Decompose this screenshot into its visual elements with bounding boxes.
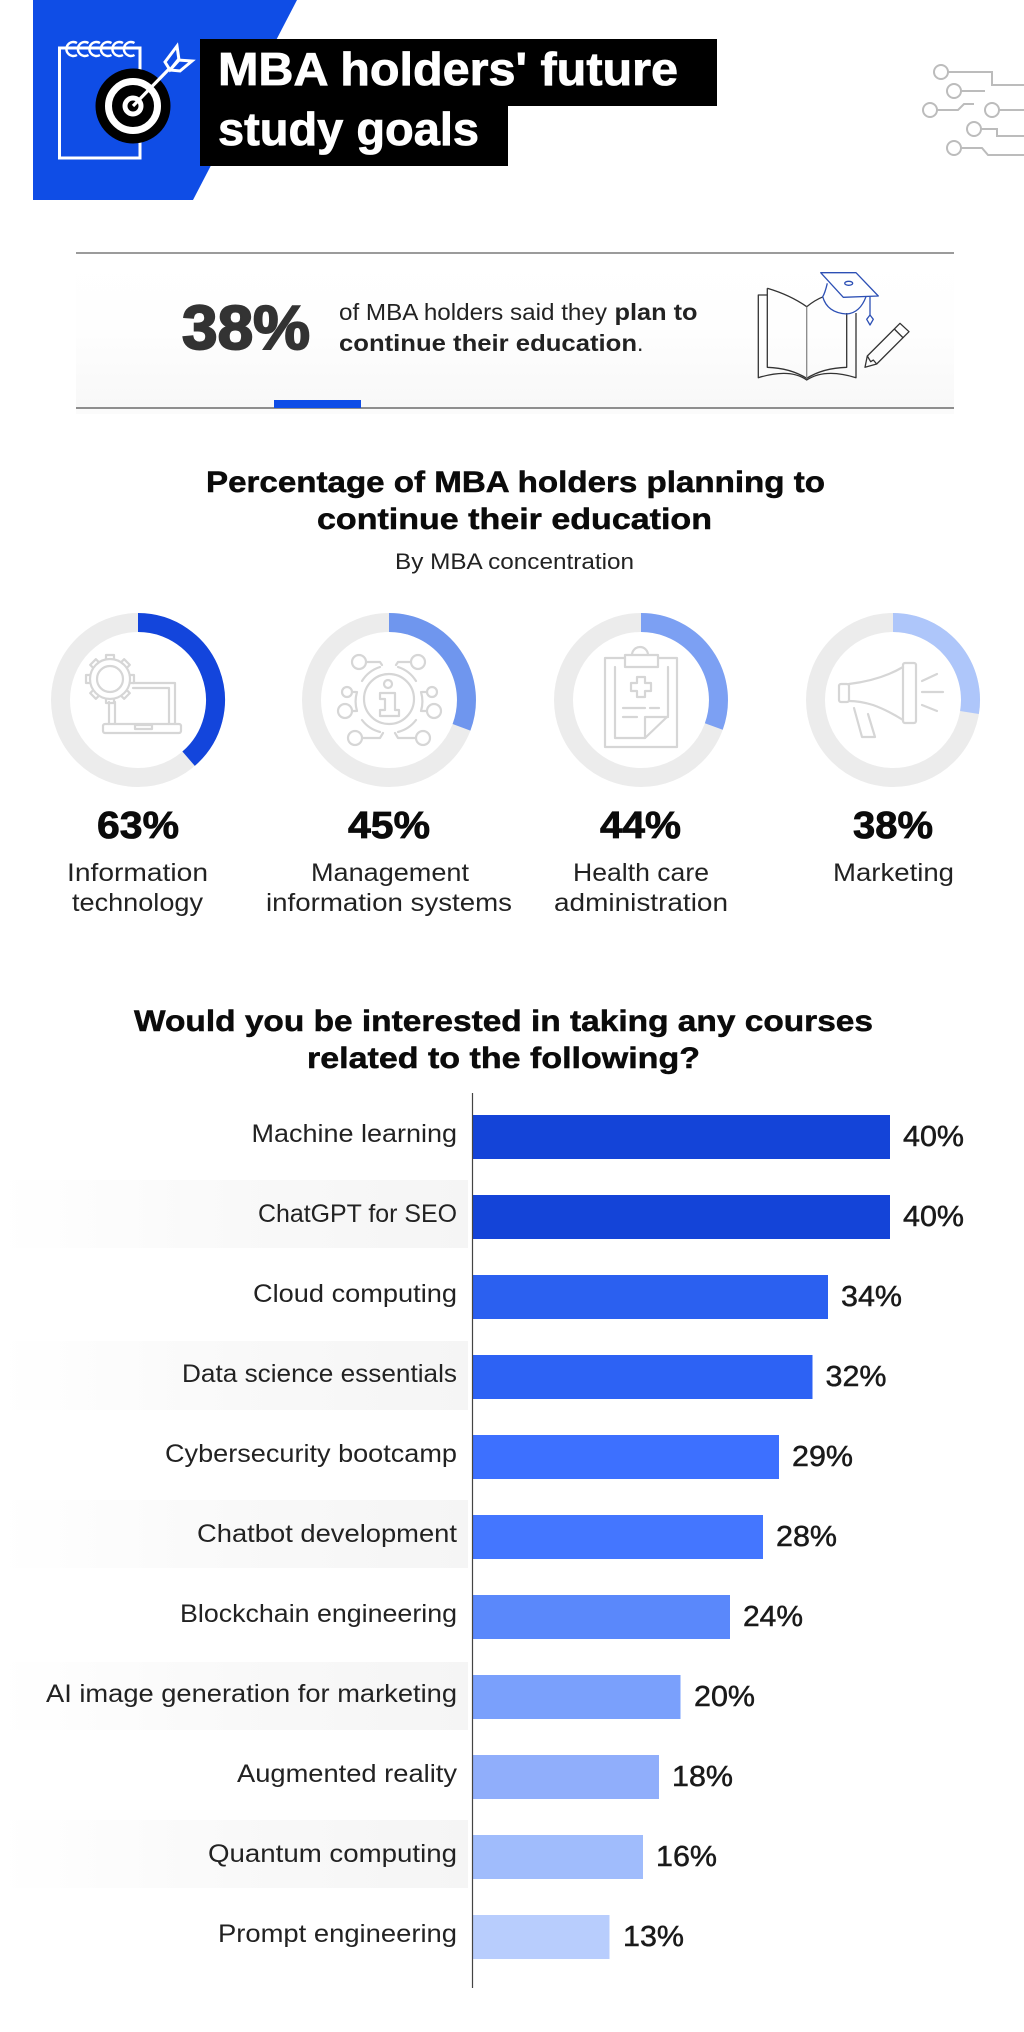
- icon: megaphone: [839, 663, 943, 737]
- row: blockchain engineering: [180, 1595, 803, 1639]
- row: prompt engineering: [218, 1915, 684, 1959]
- subheading: By MBA concentration: [395, 549, 634, 574]
- row: ai image generation for marketing: AI image generation for marketing: [46, 1680, 457, 1708]
- label: Marketing: [833, 859, 954, 887]
- label: administration: [554, 889, 728, 917]
- bar chart: courses: [0, 1093, 964, 1988]
- label: Information: [67, 859, 208, 887]
- heading: course interest: related to the following?: [307, 1042, 700, 1075]
- row: quantum computing: 16%: [656, 1841, 717, 1873]
- label: [67, 859, 208, 917]
- heading: percentage planning to continue: [206, 466, 825, 536]
- row: cybersecurity bootcamp: Cybersecurity bootcamp: [165, 1440, 457, 1468]
- decoration: circuit lines: [923, 65, 1024, 155]
- icon: notebook and target: [60, 42, 192, 158]
- row: augmented reality: [237, 1755, 733, 1799]
- row: cybersecurity bootcamp: 29%: [792, 1441, 853, 1473]
- icon: info network: [338, 655, 441, 745]
- row: cloud computing: [253, 1275, 902, 1319]
- row: data science essentials: Data science essentials: [182, 1360, 457, 1388]
- value: 45%: [348, 805, 430, 847]
- donut: information technology 63%: [60, 622, 216, 917]
- callout text: of MBA holders said they: [339, 299, 608, 325]
- donut: health care administration 44%: [554, 622, 728, 917]
- donut: management information systems 45%: [266, 622, 512, 917]
- value: 44%: [600, 805, 681, 847]
- value: 63%: [97, 805, 179, 847]
- heading: course interest: [134, 1005, 873, 1075]
- icon: clipboard: [605, 647, 677, 747]
- heading: percentage planning to continue: Percentage of MBA holders planning to: [206, 466, 825, 499]
- row: chatbot development: 28%: [776, 1521, 837, 1553]
- row: data science essentials: 32%: [826, 1361, 886, 1393]
- title: MBA holders' future: [218, 43, 678, 95]
- label: Management: [311, 859, 469, 887]
- title: study goals: [218, 103, 479, 155]
- row: machine learning: Machine learning: [252, 1120, 457, 1148]
- callout text: continue their education: [339, 330, 637, 356]
- row: chatbot development: [197, 1515, 837, 1559]
- callout text: .: [637, 330, 643, 356]
- row: quantum computing: [208, 1835, 717, 1879]
- row: ai image generation for marketing: [46, 1675, 755, 1719]
- big number: 38%: [182, 294, 310, 363]
- donut: marketing 38%: [816, 622, 971, 887]
- row: chatbot development: Chatbot development: [197, 1520, 457, 1548]
- row: chatgpt for seo: ChatGPT for SEO: [258, 1200, 457, 1228]
- icon: gear and laptop: [86, 655, 181, 733]
- row: augmented reality: 18%: [672, 1761, 733, 1793]
- title: [200, 39, 717, 166]
- row: prompt engineering: 13%: [623, 1921, 684, 1953]
- icon: book, cap and pencil: [758, 273, 909, 380]
- row: prompt engineering: Prompt engineering: [218, 1920, 457, 1948]
- label: [266, 859, 512, 917]
- row: augmented reality: Augmented reality: [237, 1760, 458, 1788]
- label: information systems: [266, 889, 512, 917]
- row: blockchain engineering: Blockchain engineering: [180, 1600, 457, 1628]
- row: ai image generation for marketing: 20%: [694, 1681, 755, 1713]
- label: technology: [72, 889, 204, 917]
- value: 38%: [853, 805, 933, 847]
- label: [554, 859, 728, 917]
- header blue panel: [33, 0, 297, 200]
- heading: course interest: Would you be interested in taking any courses: [134, 1005, 873, 1038]
- label: Health care: [573, 859, 709, 887]
- heading: percentage planning to continue: continue their education: [317, 503, 712, 536]
- row: chatgpt for seo: 40%: [903, 1201, 964, 1233]
- row: cybersecurity bootcamp: [165, 1435, 853, 1479]
- row: cloud computing: Cloud computing: [253, 1280, 457, 1308]
- row: machine learning: 40%: [903, 1121, 964, 1153]
- panel: 38% callout: [76, 253, 954, 414]
- callout text: plan to: [614, 299, 698, 325]
- row: data science essentials: [182, 1355, 886, 1399]
- callout text: [339, 299, 698, 356]
- row: machine learning: [252, 1115, 964, 1159]
- row: blockchain engineering: 24%: [743, 1601, 803, 1633]
- row: chatgpt for seo: [258, 1195, 964, 1239]
- row: quantum computing: Quantum computing: [208, 1840, 457, 1868]
- row: cloud computing: 34%: [841, 1281, 902, 1313]
